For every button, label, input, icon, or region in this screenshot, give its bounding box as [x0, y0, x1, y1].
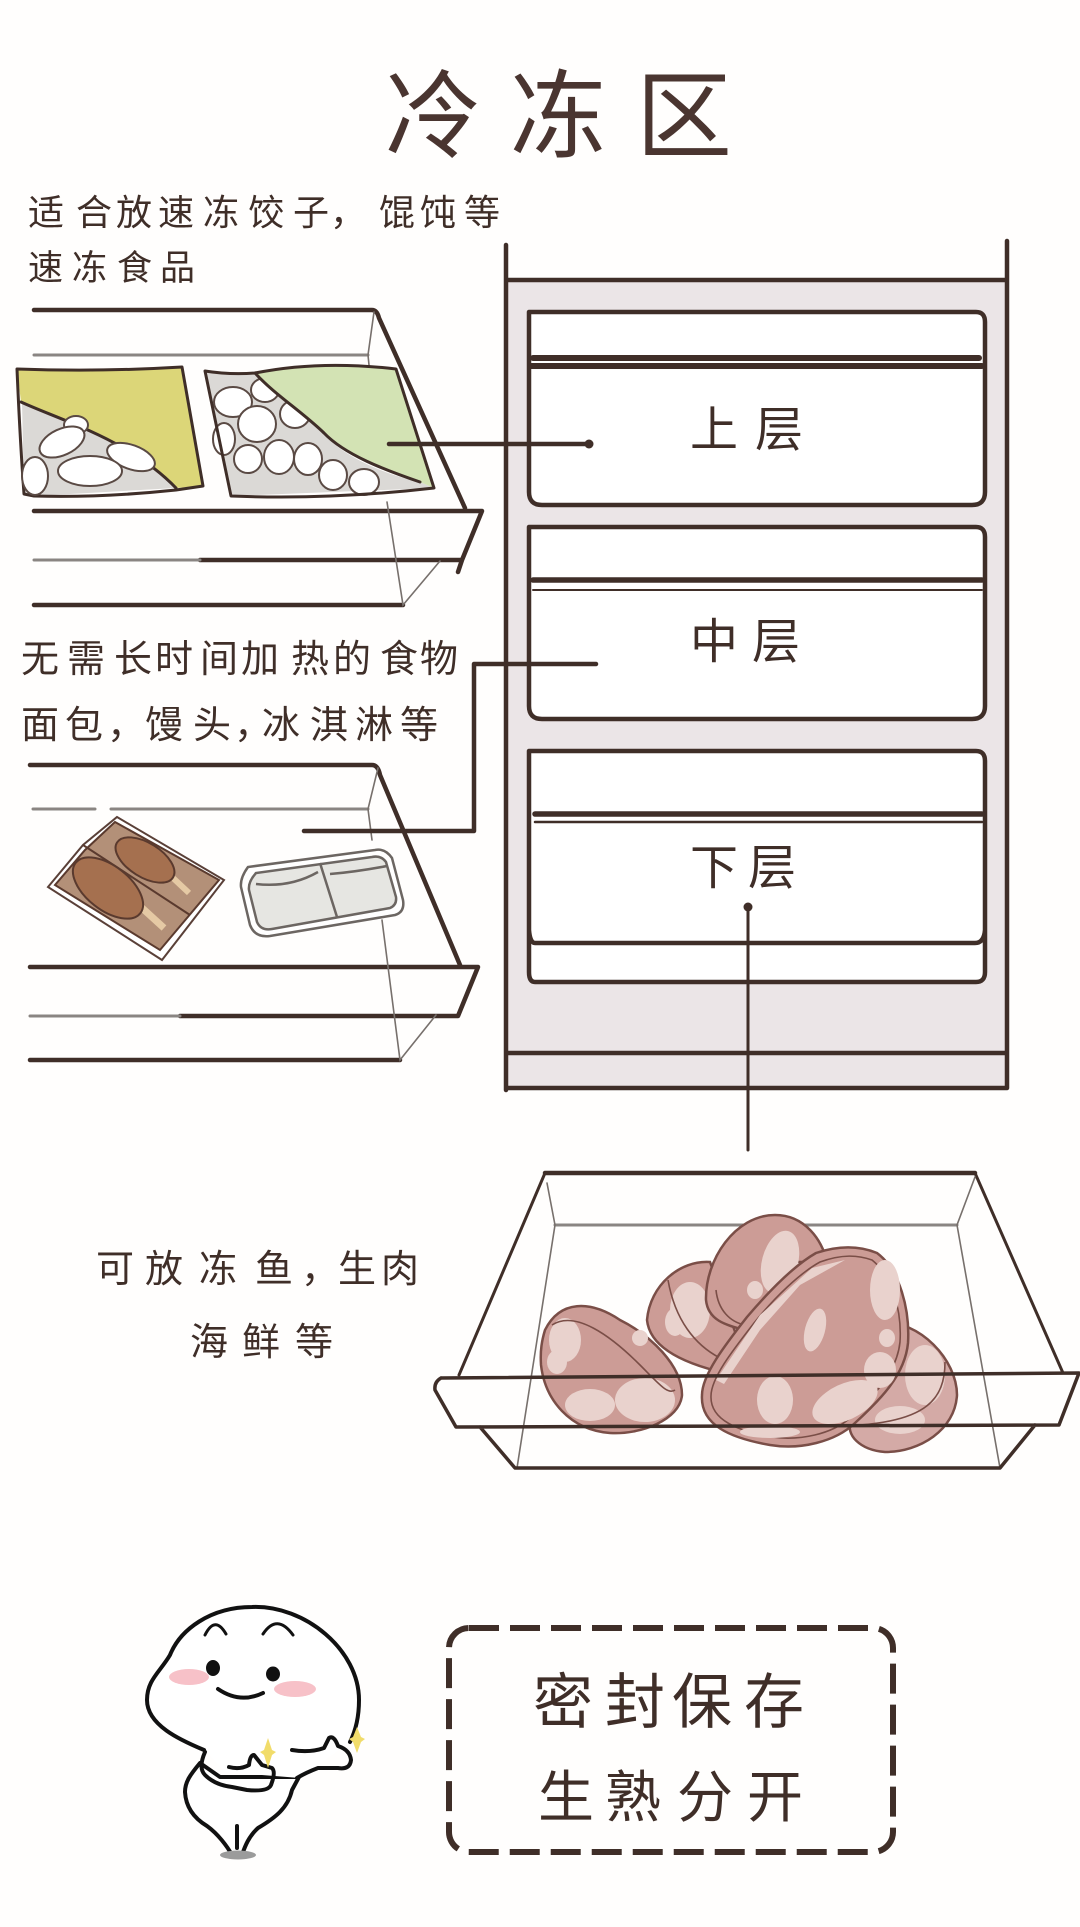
panel: bottom drawer illustration — [435, 1173, 1079, 1468]
mascot arms — [202, 1737, 351, 1848]
tray front — [435, 1373, 1079, 1468]
meat: back middle — [647, 1262, 738, 1373]
panel: freezer cabinet — [506, 241, 1007, 1090]
connector: upper layer to top drawer — [389, 440, 594, 448]
label: middle layer: 中层 — [690, 616, 800, 669]
text block: top drawer foods: 适合放速冻饺子，馄饨等 — [28, 192, 500, 233]
title: 冷冻区 — [385, 64, 732, 171]
drawer: upper — [529, 312, 985, 505]
text block: middle drawer foods: 无需长时间加热的食物 — [21, 639, 458, 681]
tangyuan balls — [213, 378, 379, 495]
text block: bottom drawer foods: 可放冻鱼，生肉 — [96, 1249, 419, 1291]
tray outline — [30, 765, 478, 1060]
panel: middle drawer illustration — [30, 765, 478, 1060]
meat: back top — [706, 1215, 827, 1330]
text block: bottom drawer foods: 海鲜等 — [190, 1322, 333, 1364]
text block: top drawer foods: 速冻食品 — [28, 249, 195, 288]
meat pieces — [541, 1215, 957, 1452]
tray outline — [34, 310, 482, 605]
bread package — [241, 850, 403, 936]
meat: large front — [702, 1247, 908, 1446]
meat: left — [541, 1306, 682, 1433]
label: upper layer: 上层 — [690, 404, 803, 457]
text block: middle drawer foods: 面包，馒头，冰淇淋等 — [21, 705, 438, 747]
drawer: lower — [529, 751, 985, 982]
text block: bottom drawer foods — [96, 1249, 419, 1364]
connector: lower layer to bottom drawer — [744, 902, 752, 1150]
drawer: middle — [529, 527, 985, 719]
text block: top drawer foods — [28, 192, 500, 288]
mascot — [147, 1607, 365, 1860]
meat: back right — [850, 1322, 957, 1452]
callout: storage tips: 生熟分开 — [538, 1766, 803, 1829]
ice cream package — [48, 817, 224, 960]
mascot shadow — [220, 1850, 256, 1860]
freezer body — [506, 280, 1007, 1088]
mascot face — [169, 1624, 316, 1698]
freezer walls and shelves — [506, 241, 1007, 1090]
tray back — [459, 1173, 1063, 1468]
dumplings — [22, 416, 159, 495]
ice cream bars — [62, 828, 189, 931]
connector: middle layer to middle drawer — [304, 664, 596, 831]
text block: middle drawer foods — [21, 639, 458, 747]
callout: storage tips — [449, 1628, 893, 1852]
mascot body — [185, 1763, 299, 1855]
sparkles — [260, 1727, 365, 1768]
label: lower layer: 下层 — [690, 842, 796, 895]
tangyuan bag — [205, 365, 434, 497]
mascot head — [147, 1607, 359, 1778]
panel: top drawer illustration — [17, 310, 482, 605]
callout: storage tips: 密封保存 — [533, 1669, 804, 1736]
dumpling bag — [17, 367, 203, 496]
